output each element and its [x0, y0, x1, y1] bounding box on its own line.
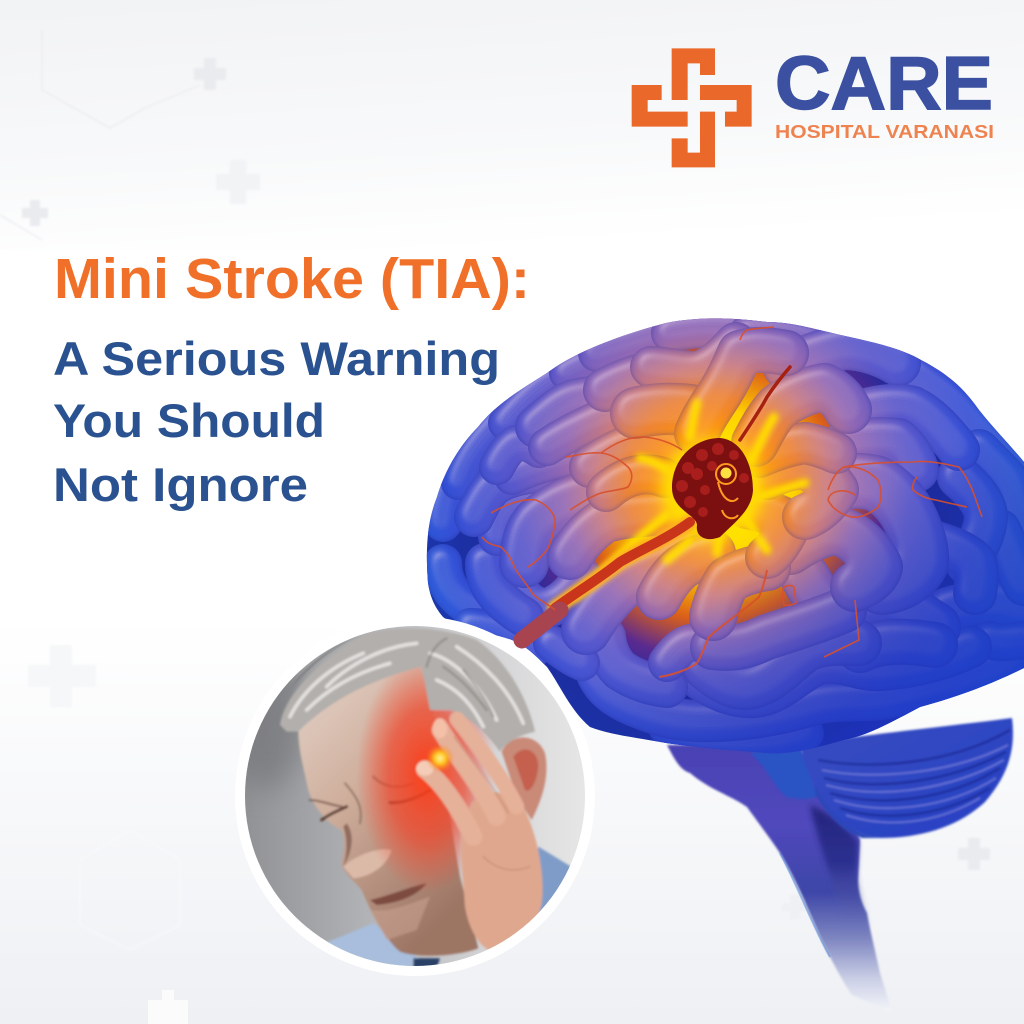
hand: [461, 792, 542, 952]
cerebellum: [800, 718, 1013, 838]
hair: [280, 629, 535, 752]
subtitle line 2: You Should: [53, 394, 325, 447]
blood vessels: [482, 327, 982, 677]
blood clot: [672, 438, 753, 539]
glowing dot: [426, 744, 454, 772]
face: [298, 667, 478, 956]
title line orange: Mini Stroke (TIA):: [54, 247, 530, 311]
brain: [420, 310, 1024, 760]
logo: [632, 41, 994, 167]
central glow: [574, 403, 805, 597]
artery: [522, 367, 790, 640]
subtitle line 3: Not Ignore: [53, 458, 308, 511]
brainstem: [667, 745, 892, 1012]
title: [53, 247, 530, 511]
fingertips glow: [433, 718, 447, 738]
shading overlay: [603, 450, 1024, 754]
circular photo: man with headache: [225, 616, 595, 977]
brain base: [420, 310, 1024, 760]
gyri folds: [443, 329, 1024, 743]
red pain glow: [360, 666, 494, 888]
subtitle line 1: A Serious Warning: [53, 332, 500, 385]
ear: [502, 737, 546, 820]
eyes and wrinkles: [310, 777, 430, 823]
logo cross icon: [632, 48, 752, 167]
logo tagline: HOSPITAL VARANASI: [775, 121, 994, 142]
shirt: [327, 846, 570, 966]
nose and cheek shadow: [343, 849, 392, 878]
logo wordmark: CARE: [775, 41, 993, 125]
